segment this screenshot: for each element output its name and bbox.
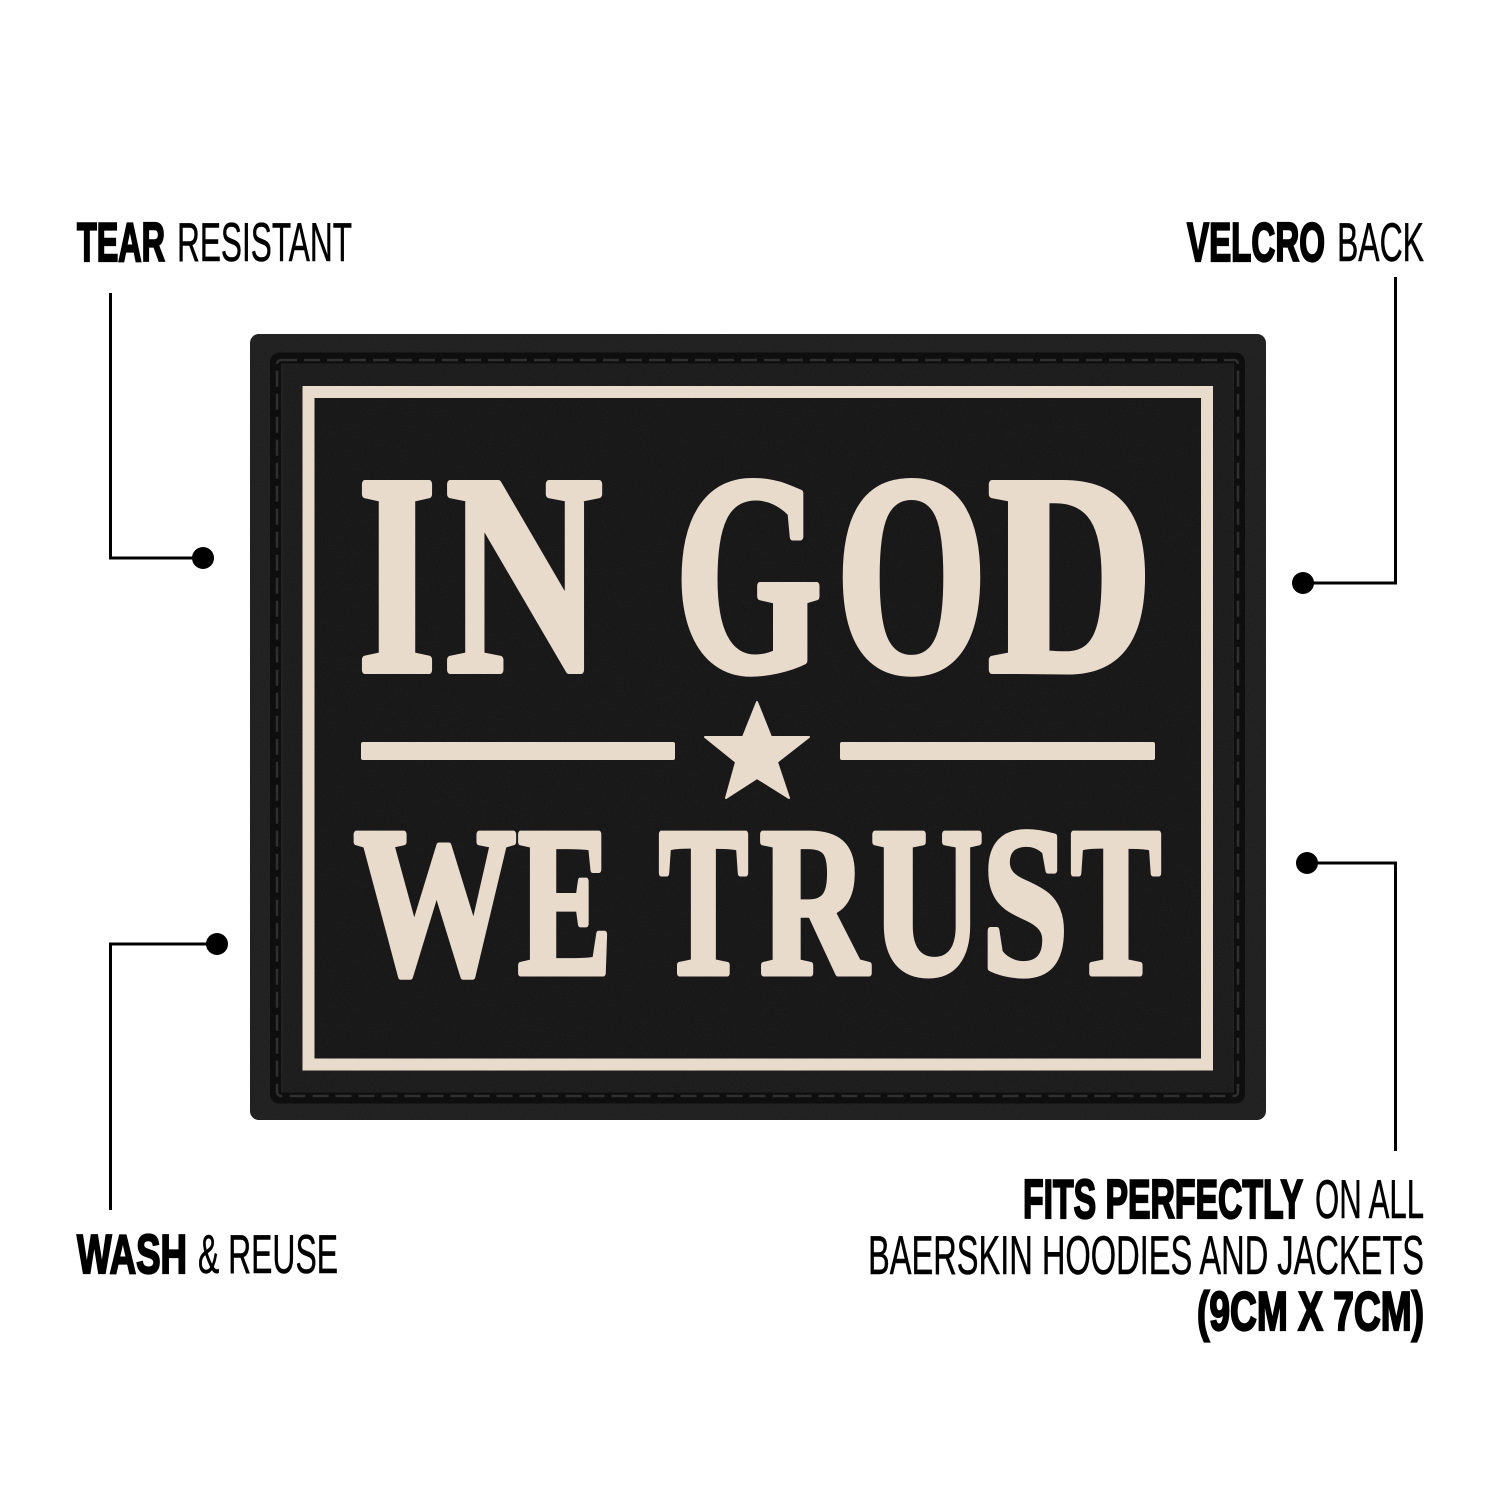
headline: WE TRUST: W	[354, 784, 516, 1019]
label	[77, 1223, 338, 1285]
headline: WE TRUST: R	[760, 784, 869, 1019]
headline: WE TRUST: T	[659, 784, 748, 1019]
stitched groove	[276, 358, 1240, 1098]
leader line	[110, 293, 214, 569]
divider bar left	[361, 742, 675, 760]
patch base	[250, 334, 1266, 1120]
patch	[250, 334, 1266, 1120]
label	[77, 211, 352, 273]
label: WASH	[77, 1223, 187, 1285]
label	[868, 1168, 1424, 1342]
label: RESISTANT	[177, 211, 352, 273]
headline: WE TRUST: U	[871, 784, 983, 1019]
label: VELCRO	[1187, 211, 1325, 273]
label: FITS PERFECTLY	[1023, 1168, 1303, 1230]
headline: IN GOD: O	[836, 418, 987, 732]
leader line	[110, 933, 228, 1210]
patch surface grain	[250, 334, 1266, 1120]
headline: IN GOD: D	[988, 418, 1153, 732]
headline: IN GOD: G	[675, 418, 822, 732]
cream frame	[308, 392, 1207, 1064]
patch inner field	[283, 364, 1233, 1092]
callout: tear resistant	[77, 211, 352, 569]
headline: WE TRUST: T	[1071, 784, 1161, 1019]
divider bar right	[840, 742, 1155, 760]
headline: IN GOD: I	[358, 418, 436, 732]
label: TEAR	[77, 211, 165, 273]
label: & REUSE	[198, 1223, 338, 1285]
headline: WE TRUST: S	[982, 784, 1068, 1019]
headline: IN GOD: N	[446, 418, 602, 732]
headline: WE TRUST: E	[518, 784, 612, 1019]
leader line	[1292, 277, 1396, 594]
callout: wash and reuse	[77, 933, 338, 1285]
label: BACK	[1337, 211, 1424, 273]
leader line	[1296, 852, 1396, 1151]
callout: fits perfectly	[868, 852, 1424, 1342]
callout: velcro back	[1187, 211, 1424, 594]
star	[705, 702, 809, 798]
